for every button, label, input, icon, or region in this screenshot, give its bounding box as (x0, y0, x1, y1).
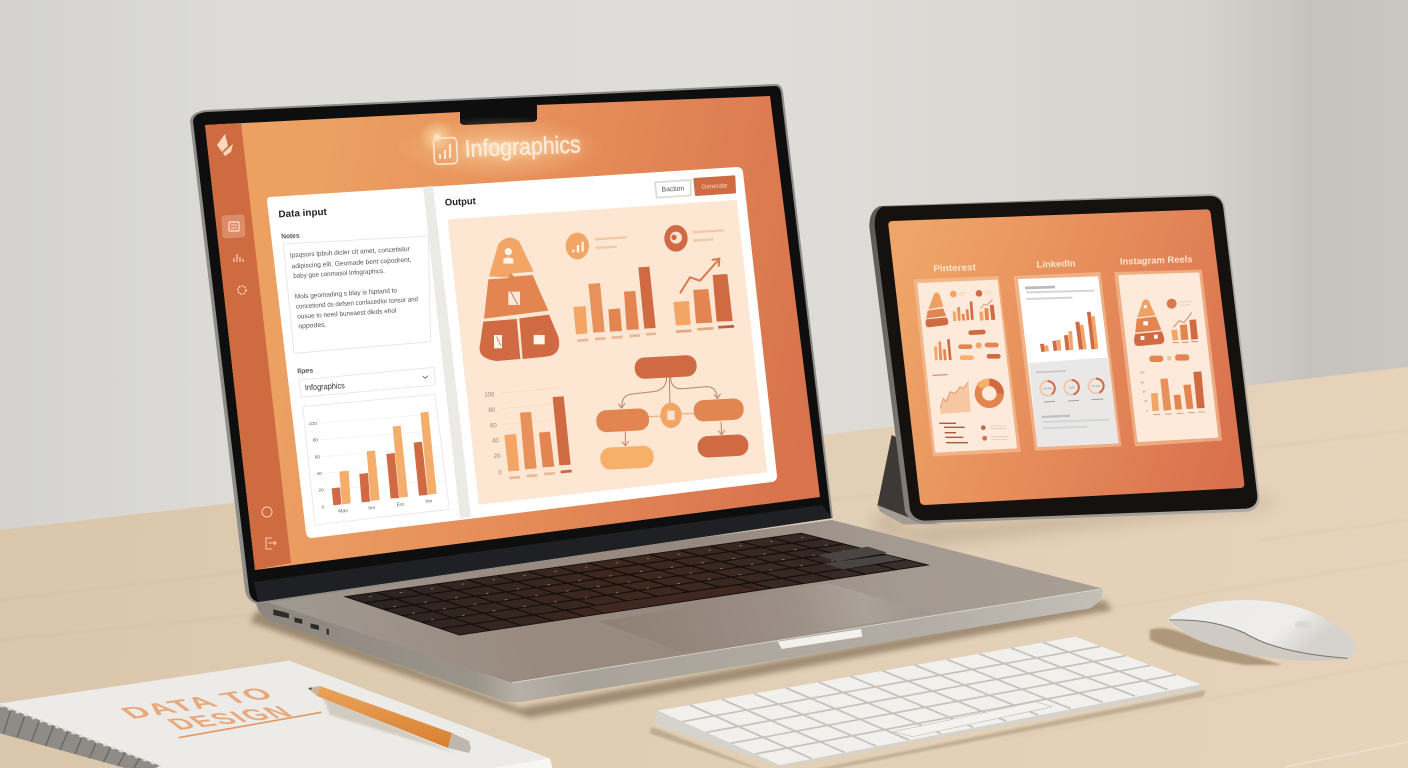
pencil imprint: GRAPHITE (384, 718, 411, 733)
sidebar help icon (262, 507, 272, 517)
dropdown and input chart (297, 367, 449, 525)
flowchart (596, 355, 749, 470)
mouse body (1168, 600, 1356, 661)
textarea (283, 236, 431, 353)
title: Infographics: Infographics (464, 131, 581, 163)
trackpad (598, 583, 932, 653)
input bar chart: 80 (313, 438, 318, 444)
title glow (395, 116, 605, 180)
bar chart: y axis 0 to 100 (484, 387, 572, 478)
input bar chart (303, 394, 449, 525)
heading: DATA TO DESIGN (114, 684, 301, 733)
textarea: oppodes. (298, 322, 327, 330)
panel: Pinterest preview (915, 277, 1019, 455)
panel: Instagram Reels preview: 0 (1146, 409, 1148, 413)
keyboard well (346, 533, 928, 635)
tablet on stand (869, 194, 1259, 524)
tablet screen (888, 209, 1244, 505)
panel: LinkedIn preview: 12% (1069, 385, 1075, 389)
bar chart: y axis 0 to 100: 20 (494, 454, 501, 460)
sidebar chart icon (234, 254, 243, 262)
button: Baction (655, 180, 691, 198)
panel: LinkedIn preview: 35.4% (1043, 386, 1052, 390)
stat icon: bar circle (566, 233, 627, 259)
bar chart: y axis 0 to 100: 60 (490, 423, 497, 429)
button: Baction: Baction (661, 185, 685, 194)
tablet stand (877, 435, 913, 521)
input bar chart: 60 (315, 454, 320, 460)
button: Generate: Generate (701, 183, 728, 191)
wall background (0, 0, 1408, 540)
textarea: ousue to need burwaest dleds ehol (297, 308, 397, 321)
input bar chart: Man (338, 508, 348, 515)
title: Infographics: Infographics (464, 131, 581, 163)
dropdown: Infographics (305, 380, 345, 392)
heading: DATA TO DESIGN: DESIGN (160, 702, 301, 733)
panel: data input (278, 207, 431, 353)
tablet label: LinkedIn: LinkedIn (1036, 258, 1076, 270)
heading: DATA TO DESIGN: DATA TO (114, 684, 282, 722)
tablet body (869, 194, 1259, 523)
laptop screen (205, 96, 820, 570)
panel: LinkedIn preview (1015, 273, 1120, 449)
label: type: Ilpes (297, 367, 314, 375)
wooden desk (0, 367, 1408, 768)
input bar chart: 0 (322, 504, 325, 510)
dropdown (299, 367, 435, 397)
tablet label: Instagram Reels: Instagram Reels (1120, 254, 1193, 267)
textarea: concetiond ds defsen confacedlor tonsor and (296, 296, 418, 311)
textarea: Mols geomading s blay is fsptand to (295, 287, 398, 301)
camera notch (460, 104, 537, 125)
sidebar active icon (221, 214, 246, 239)
spiral binding (0, 705, 161, 768)
bar chart: y axis 0 to 100: 0 (498, 470, 502, 476)
input bar chart: Inn (425, 498, 433, 505)
bar chart: five bars (573, 267, 656, 341)
textarea: adipiscing elit. Geomade bent copodrent, (291, 257, 412, 270)
textarea: Ipsqsors lpbuh dicler cit amet, concetistur (290, 246, 411, 259)
bar chart: y axis 0 to 100: 80 (488, 408, 496, 414)
mouse logo (1295, 620, 1312, 628)
input bar chart: 20 (318, 488, 324, 494)
textarea: baby goe conmasol Infographics. (293, 268, 385, 280)
input bar chart: Ext (397, 502, 405, 508)
stat icon: head circle (664, 225, 724, 252)
tablet shadow (870, 498, 1280, 545)
base body (256, 520, 1103, 702)
wireless keyboard (649, 637, 1206, 768)
divider between input and output (423, 186, 471, 518)
panel: output (445, 176, 767, 504)
laptop shadow (250, 600, 1112, 718)
output canvas (448, 201, 767, 504)
heading: Output: Output (445, 196, 477, 209)
panel: Instagram Reels preview (1116, 271, 1221, 445)
pencil (308, 686, 471, 753)
notebook (0, 661, 553, 768)
input bar chart: 40 (316, 471, 322, 477)
app white card (267, 167, 777, 538)
sidebar logo (217, 134, 233, 156)
pyramid diagram (480, 238, 559, 361)
bar chart: growth with arrow (673, 259, 734, 332)
mouse (1150, 600, 1356, 665)
underline (179, 712, 321, 738)
notebook page (0, 661, 552, 768)
input bar chart: 100 (309, 421, 317, 427)
keyboard space bar (894, 702, 1052, 737)
sidebar settings icon (238, 286, 246, 294)
panel: Instagram Reels preview: 60 (1143, 390, 1146, 394)
hinge strip (254, 505, 832, 602)
front notch tab (778, 629, 862, 649)
laptop base (256, 520, 1103, 702)
label: Notes: Notes (281, 233, 300, 241)
base top surface (257, 520, 1101, 683)
bar chart: y axis 0 to 100: 40 (492, 439, 499, 445)
panel: Instagram Reels preview: 100 (1139, 371, 1145, 375)
panel: Instagram Reels preview: 80 (1141, 381, 1144, 385)
panel: Instagram Reels preview: 40 (1144, 399, 1148, 403)
title: Infographics (419, 119, 581, 165)
tablet label: Pinterest: Pinterest (933, 262, 976, 274)
side ports (273, 609, 329, 635)
sidebar (205, 123, 291, 570)
input bar chart: Inn (368, 505, 376, 512)
bar chart: y axis 0 to 100: 100 (484, 393, 495, 399)
button: Generate (694, 176, 735, 195)
keyboard body (656, 637, 1201, 767)
laptop lid (190, 84, 833, 604)
heading: Data input: Data input (278, 207, 328, 220)
sidebar logout icon (266, 538, 276, 549)
space bar (587, 585, 759, 613)
panel: LinkedIn preview: 74.1% (1092, 384, 1101, 388)
